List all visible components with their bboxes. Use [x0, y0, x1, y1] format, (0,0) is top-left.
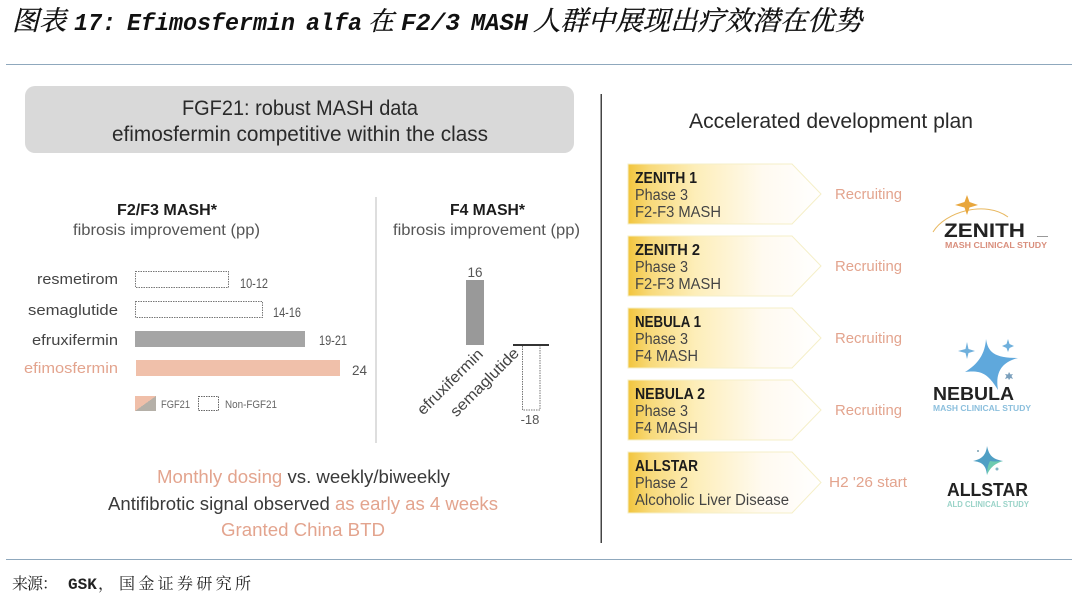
chart heading: F4 MASH* [450, 202, 526, 219]
title [12, 0, 864, 38]
bar: efruxifermin: 19-21 [319, 333, 347, 348]
bar: semaglutide: semaglutide [28, 302, 118, 319]
legend: Non-FGF21 [225, 399, 277, 411]
trial: NEBULA 2: NEBULA 2 [635, 386, 705, 403]
trial: ALLSTAR: Alcoholic Liver Disease [635, 492, 789, 509]
heading banner [25, 86, 574, 153]
trial: ZENITH 2: ZENITH 2 [635, 242, 700, 259]
bar: semaglutide: semaglutide [447, 345, 523, 420]
bar: semaglutide: -18 [521, 412, 539, 427]
bar: efruxifermin: efruxifermin [32, 332, 118, 349]
chart heading [73, 202, 260, 239]
chart: F2/F3 MASH [24, 202, 368, 411]
bottom rule [6, 559, 1072, 560]
bar: resmetirom: 10-12 [240, 276, 268, 291]
trial: ZENITH 1: F2-F3 MASH [635, 204, 721, 221]
source note: 来源： [12, 571, 58, 594]
panel: development plan [628, 110, 1048, 513]
key takeaways [108, 467, 498, 540]
heading banner: FGF21: robust MASH data [182, 97, 418, 120]
trial: NEBULA 2: F4 MASH [635, 420, 698, 437]
chart heading: fibrosis improvement (pp) [393, 222, 580, 239]
legend [135, 396, 277, 411]
trial: NEBULA 1: Phase 3 [635, 331, 688, 348]
source note [12, 571, 251, 594]
bar: resmetirom: resmetirom [37, 271, 118, 288]
source note: 国金证券研究所 [119, 571, 251, 594]
logo: ALLSTAR: ALLSTAR [947, 480, 1028, 500]
bar: efimosfermin [24, 360, 368, 378]
chart heading [393, 202, 580, 239]
trial: NEBULA 1: NEBULA 1 [635, 314, 701, 331]
key takeaways: Antifibrotic signal observed as early as 4 weeks [108, 494, 498, 514]
trial: NEBULA 1: Recruiting [835, 330, 902, 347]
trial: NEBULA 2: Phase 3 [635, 403, 688, 420]
trial: ALLSTAR: Phase 2 [635, 475, 688, 492]
bar: efruxifermin [32, 331, 347, 349]
bar: resmetirom [37, 271, 268, 291]
trial: ZENITH 1: Recruiting [835, 186, 902, 203]
source note: ， [98, 571, 114, 594]
logo: ZENITH: ZENITH [944, 220, 1025, 242]
source note: GSK [68, 576, 97, 594]
logo: ALLSTAR: ALD CLINICAL STUDY [947, 500, 1030, 509]
title: Efimosfermin [127, 11, 295, 38]
legend: FGF21 [161, 399, 190, 411]
trial: NEBULA 1 [628, 308, 902, 368]
bar: semaglutide [28, 302, 301, 320]
trial: ZENITH 1: Phase 3 [635, 187, 688, 204]
logo: ALLSTAR [947, 446, 1030, 509]
top rule [6, 64, 1072, 65]
bar: efimosfermin: 24 [352, 363, 368, 378]
trial: NEBULA 2 [628, 380, 902, 440]
trial: ZENITH 1: ZENITH 1 [635, 170, 697, 187]
heading: Accelerated development plan [689, 110, 973, 133]
heading banner: efimosfermin competitive within the class [112, 123, 488, 146]
trial: ALLSTAR: ALLSTAR [635, 458, 698, 475]
bar: efruxifermin: 16 [467, 265, 483, 280]
trial: ZENITH 2: F2-F3 MASH [635, 276, 721, 293]
bar: semaglutide [447, 344, 549, 427]
trial: ZENITH 1 [628, 164, 902, 224]
title: alfa [306, 11, 362, 38]
trial: NEBULA 2: Recruiting [835, 402, 902, 419]
key takeaways: Granted China BTD [221, 520, 385, 540]
logo: ZENITH [933, 195, 1048, 250]
trial: ZENITH 2: Recruiting [835, 258, 902, 275]
trial: ALLSTAR [628, 452, 908, 513]
chart heading: fibrosis improvement (pp) [73, 222, 260, 239]
trial: ALLSTAR: H2 '26 start [829, 474, 908, 491]
chart: F4 MASH [393, 202, 580, 427]
trial: NEBULA 1: F4 MASH [635, 348, 698, 365]
bar: efimosfermin: efimosfermin [24, 360, 118, 377]
bar: efruxifermin [414, 265, 487, 419]
panel: FGF21 efficacy [24, 86, 580, 540]
title: 17: [74, 11, 116, 38]
logo: NEBULA: MASH CLINICAL STUDY [933, 403, 1031, 413]
trial: ZENITH 2: Phase 3 [635, 259, 688, 276]
title: 图表 [12, 0, 69, 38]
chart heading: F2/F3 MASH* [117, 202, 218, 219]
logo: ZENITH: MASH CLINICAL STUDY [945, 240, 1047, 250]
logo: NEBULA: NEBULA [933, 384, 1014, 404]
trial: ZENITH 2 [628, 236, 902, 296]
title: 在 [368, 1, 397, 38]
bar: efruxifermin: efruxifermin [414, 346, 487, 419]
key takeaways: Monthly dosing vs. weekly/biweekly [157, 467, 450, 487]
title: MASH [470, 11, 529, 38]
logo: NEBULA [933, 339, 1031, 413]
bar: semaglutide: 14-16 [273, 305, 301, 320]
title: 人群中展现出疗效潜在优势 [533, 0, 864, 38]
title: F2/3 [401, 11, 460, 38]
